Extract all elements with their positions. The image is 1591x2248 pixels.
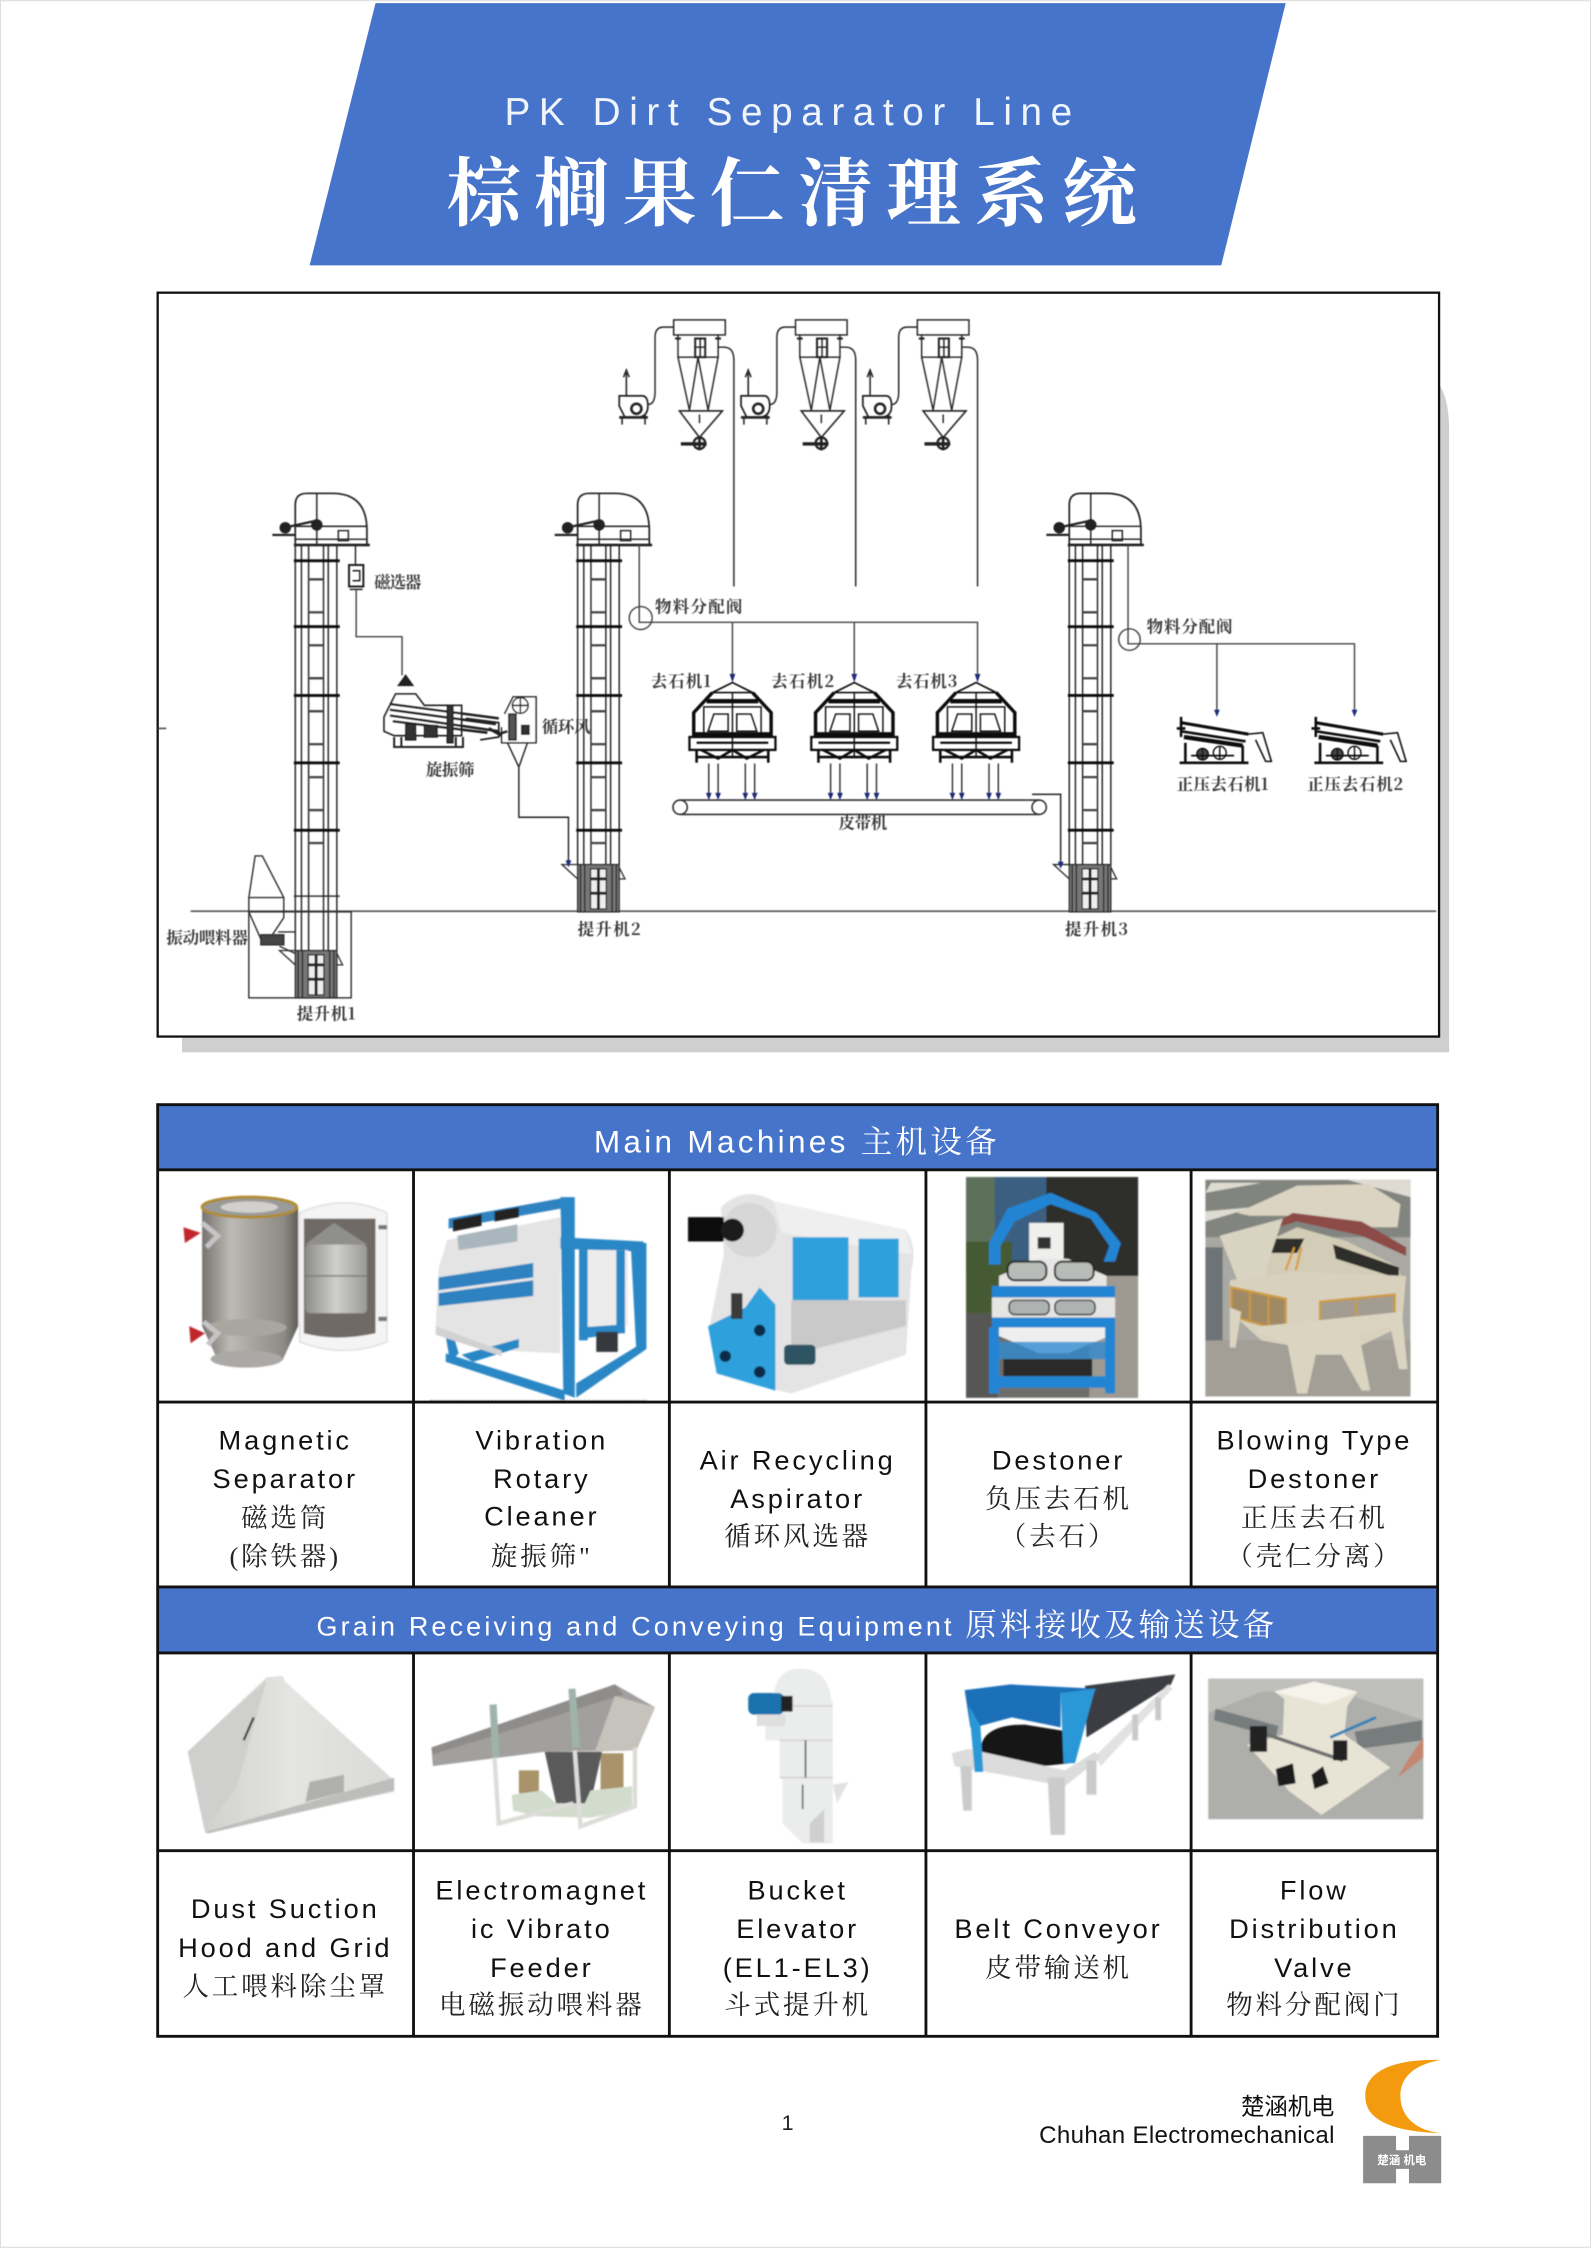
label: air recycling aspirator: 循环风选器: [724, 1521, 871, 1551]
label: bucket elevator: Elevator: [736, 1913, 859, 1944]
logo crescent: [1365, 2060, 1440, 2133]
label: magnetic separator: [213, 1424, 358, 1571]
belt conveyor: [673, 794, 1064, 869]
label: flow distribution valve: Distribution: [1229, 1913, 1400, 1944]
table grid: [158, 1105, 1438, 2037]
diagram labels: 去石机2: [771, 668, 834, 692]
diagram labels: 循环风: [542, 714, 591, 738]
bucket elevator 1: [272, 493, 370, 998]
label: electromagnetic vibrato feeder: Feeder: [490, 1952, 594, 1983]
label: bucket elevator: [723, 1874, 873, 2020]
blowing destoners: [1177, 717, 1406, 763]
process schematic: [158, 320, 1436, 1024]
chinese title: 棕榈果仁清理系统: [446, 135, 1150, 242]
english title: PK Dirt Separator Line: [505, 91, 1081, 134]
company logo: [1363, 2060, 1441, 2183]
label: air recycling aspirator: Air Recycling: [700, 1444, 896, 1475]
diagram labels: 提升机2: [578, 916, 641, 940]
label: air recycling aspirator: Aspirator: [730, 1483, 865, 1514]
diagram labels: 提升机3: [1065, 916, 1128, 940]
header: grain receiving and conveying: Grain Receiving and Conveying Equipment 原料接收及输送设备: [317, 1601, 1277, 1646]
header: grain receiving and conveying: [158, 1587, 1438, 1653]
label: magnetic separator: Magnetic: [219, 1424, 352, 1455]
diagram labels: [166, 569, 1403, 1024]
photo: air recycling aspirator: [688, 1194, 914, 1393]
diagram labels: 物料分配阀: [655, 593, 742, 617]
company name: 楚涵机电: [1241, 2093, 1334, 2119]
label: dust suction hood: 人工喂料除尘罩: [182, 1971, 388, 2001]
company name: [1039, 2093, 1334, 2149]
recycling aspirator: [489, 697, 571, 867]
label: bucket elevator: 斗式提升机: [724, 1990, 871, 2020]
label: vibration rotary cleaner: Rotary: [493, 1463, 590, 1494]
labels: grain receiving equipment: [178, 1874, 1402, 2020]
label: flow distribution valve: [1226, 1874, 1402, 2020]
destoners: [689, 683, 1019, 800]
diagram labels: 磁选器: [374, 569, 422, 593]
label: vibration rotary cleaner: Cleaner: [484, 1500, 599, 1531]
distribution line to destoners: [629, 545, 980, 683]
photo: blowing type destoner: [1205, 1180, 1410, 1396]
label: destoner: 负压去石机: [985, 1484, 1132, 1514]
label: magnetic separator: Separator: [213, 1463, 358, 1494]
label: destoner: Destoner: [992, 1444, 1125, 1475]
label: electromagnetic vibrato feeder: ic Vibrato: [471, 1913, 613, 1944]
header: main machines: Main Machines 主机设备: [594, 1118, 1000, 1163]
diagram labels: 正压去石机2: [1307, 771, 1403, 795]
label: belt conveyor: Belt Conveyor: [954, 1913, 1163, 1944]
label: belt conveyor: 皮带输送机: [985, 1953, 1132, 1983]
label: electromagnetic vibrato feeder: Electromagnet: [435, 1874, 648, 1905]
equipment table: [158, 1105, 1438, 2037]
label: electromagnetic vibrato feeder: [435, 1874, 648, 2020]
label: vibration rotary cleaner: Vibration: [475, 1424, 608, 1455]
photo: flow distribution valve: [1208, 1679, 1423, 1819]
logo caption: 楚涵 机电: [1377, 2153, 1427, 2167]
diagram labels: 旋振筛: [426, 757, 475, 781]
panel shadow: [182, 384, 1449, 1052]
label: destoner: [985, 1444, 1132, 1551]
vibrating feeder and pit: [249, 856, 351, 998]
label: air recycling aspirator: [700, 1444, 896, 1551]
panel frame: [158, 293, 1439, 1037]
label: destoner: （去石）: [1000, 1521, 1117, 1551]
bucket elevator 2: [555, 493, 652, 912]
dust filters: [619, 320, 978, 586]
diagram labels: 去石机3: [896, 668, 957, 692]
magnetic separator: [349, 545, 402, 675]
label: blowing type destoner: （壳仁分离）: [1226, 1541, 1402, 1571]
company name: Chuhan Electromechanical: [1039, 2122, 1334, 2149]
diagram labels: 物料分配阀: [1147, 613, 1233, 637]
diagram labels: 提升机1: [297, 1000, 356, 1024]
logo block: [1363, 2136, 1441, 2183]
diagram labels: 正压去石机1: [1177, 771, 1269, 795]
header: main machines: [158, 1105, 1438, 1170]
label: flow distribution valve: 物料分配阀门: [1226, 1990, 1402, 2020]
label: flow distribution valve: Flow: [1280, 1874, 1349, 1905]
ground line: [158, 728, 1436, 911]
label: dust suction hood: Dust Suction: [191, 1893, 380, 1924]
label: blowing type destoner: Blowing Type: [1216, 1424, 1412, 1455]
label: dust suction hood: Hood and Grid: [178, 1932, 392, 1963]
label: magnetic separator: (除铁器): [229, 1541, 341, 1571]
rotary sieve: [384, 675, 499, 747]
bucket elevator 3: [1046, 493, 1144, 912]
photo: electromagnetic vibrating feeder: [431, 1684, 655, 1826]
label: vibration rotary cleaner: 旋振筛": [491, 1541, 593, 1571]
label: bucket elevator: (EL1-EL3): [723, 1952, 873, 1983]
label: magnetic separator: 磁选筒: [241, 1503, 329, 1533]
title banner: [310, 3, 1286, 265]
photo: destoner: [966, 1177, 1138, 1398]
label: flow distribution valve: Valve: [1274, 1952, 1355, 1983]
page number: 1: [782, 2111, 794, 2135]
label: vibration rotary cleaner: [475, 1424, 608, 1571]
label: blowing type destoner: [1216, 1424, 1412, 1571]
photo: bucket elevator: [748, 1669, 849, 1844]
diagram labels: 去石机1: [651, 668, 711, 692]
label: blowing type destoner: Destoner: [1248, 1463, 1381, 1494]
labels: main machines: [213, 1424, 1412, 1571]
label: electromagnetic vibrato feeder: 电磁振动喂料器: [439, 1990, 645, 2020]
diagram labels: 皮带机: [838, 810, 888, 834]
label: blowing type destoner: 正压去石机: [1241, 1503, 1388, 1533]
photo: dust suction hood: [188, 1676, 394, 1834]
photo: magnetic separator: [183, 1197, 387, 1368]
label: belt conveyor: [954, 1913, 1163, 1983]
label: dust suction hood: [178, 1893, 392, 2001]
photo: vibration rotary cleaner: [430, 1197, 646, 1401]
photo: belt conveyor: [952, 1674, 1175, 1835]
label: bucket elevator: Bucket: [747, 1874, 848, 1905]
diagram labels: 振动喂料器: [166, 924, 248, 948]
process flow diagram panel: [158, 293, 1449, 1052]
distribution line to blowing destoners: [1119, 545, 1357, 717]
